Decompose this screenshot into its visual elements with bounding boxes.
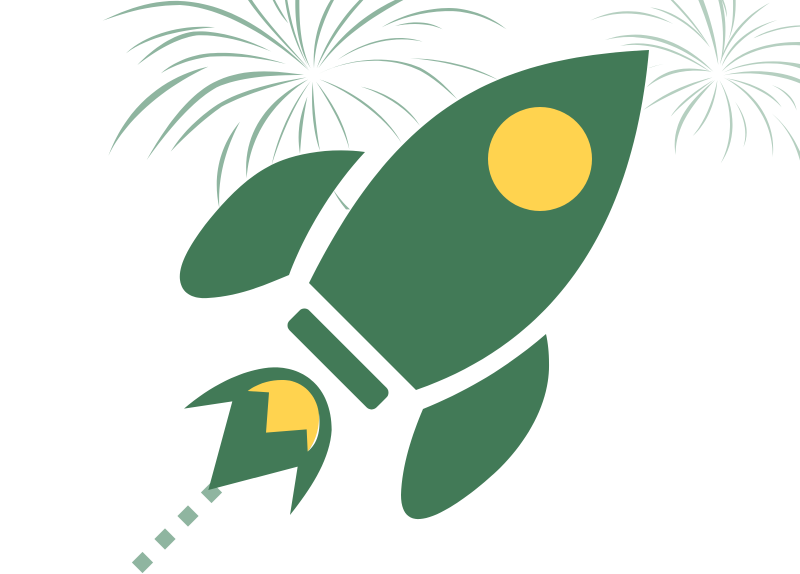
flame outer (184, 367, 332, 515)
lower fin (401, 334, 549, 519)
rocket body (309, 50, 649, 390)
engine bar (285, 306, 391, 412)
firework: small right burst (590, 0, 800, 163)
exhaust trail: dashed diamonds (132, 482, 222, 573)
upper fin (180, 150, 365, 298)
firework: large left burst (103, 0, 507, 209)
flame highlight edge (308, 413, 320, 452)
flame inner (248, 380, 319, 452)
flame (184, 367, 332, 515)
rocket window (488, 107, 592, 211)
